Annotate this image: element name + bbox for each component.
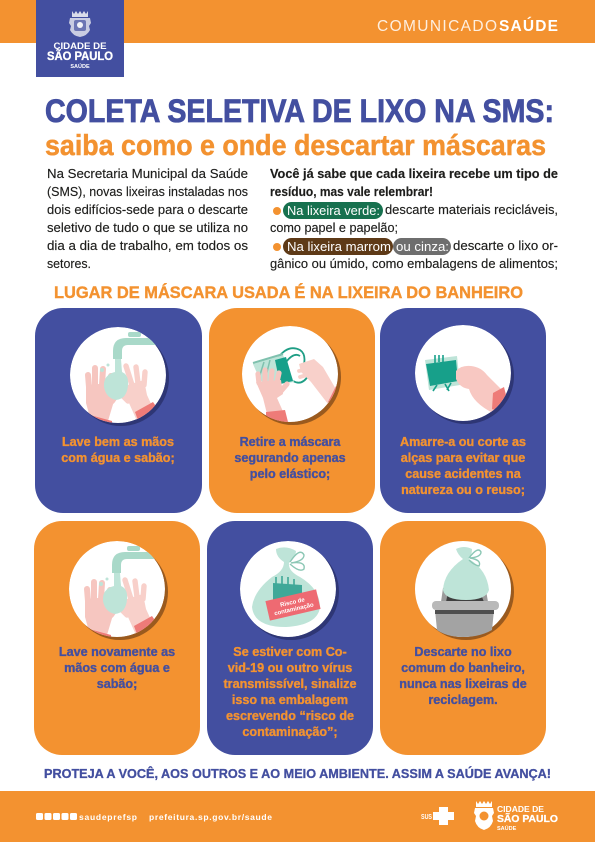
website: prefeitura.sp.gov.br/saude: [149, 812, 272, 822]
intro text: right column: Você já sabe que cada lixeira recebe um tipo de: [270, 166, 558, 181]
logo: Cidade de São Paulo Saúde: SAÚDE: [70, 63, 90, 70]
intro text: left column: dia a dia de trabalho, em todos os: [47, 238, 249, 253]
icon: hands under faucet: [70, 327, 168, 430]
card 1: wash hands: [35, 308, 202, 513]
risk label: contaminação: [274, 602, 315, 617]
card 2: remove mask: [209, 308, 375, 513]
card 5: signal contamination risk: isso na embalagem: [232, 693, 348, 707]
section heading: LUGAR DE MÁSCARA USADA É NA LIXEIRA DO BANHEIRO: [54, 283, 523, 302]
card 5: signal contamination risk: Se estiver com Co-: [233, 645, 347, 659]
logo: Cidade de São Paulo: SÃO PAULO: [497, 812, 558, 825]
card 5: signal contamination risk: contaminação”;: [242, 725, 338, 739]
card 6: discard in common bin: Descarte no lixo: [414, 645, 512, 659]
brown and gray bin bullet: Na lixeira marrom: [287, 239, 391, 254]
card 5: signal contamination risk: vid-19 ou outro vírus: [228, 661, 352, 675]
card 6: discard in common bin: nunca nas lixeiras de: [399, 677, 527, 691]
footer band: [0, 791, 595, 842]
logo: Cidade de São Paulo Saúde: CIDADE DE: [54, 40, 106, 51]
intro text: left column: [47, 166, 249, 271]
title: saiba como e onde descartar máscaras: [45, 130, 546, 162]
logo: SUS: SUS: [421, 814, 432, 821]
card 1: wash hands: com água e sabão;: [61, 451, 175, 465]
logo: Cidade de São Paulo: SAÚDE: [497, 825, 517, 832]
risk label: Risco de: [280, 597, 306, 609]
card 3: tie or cut straps: natureza ou o reuso;: [401, 483, 525, 497]
card 2: remove mask: pelo elástico;: [250, 467, 330, 481]
card 6: discard in common bin: reciclagem.: [428, 693, 498, 707]
intro text: left column: (SMS), novas lixeiras instaladas nos: [47, 184, 248, 199]
card 6: discard in common bin: comum do banheiro,: [401, 661, 525, 675]
card 1: wash hands: Lave bem as mãos: [62, 435, 174, 449]
green bin bullet: como papel e papelão;: [270, 220, 398, 235]
card 5: signal contamination risk: transmissível, sinalize: [223, 677, 357, 691]
icon: bag in gray trash bin: [415, 541, 511, 637]
green bin bullet: descarte materiais recicláveis,: [385, 202, 558, 217]
logo: Cidade de São Paulo Saúde: SÃO PAULO: [47, 50, 113, 63]
logo: Cidade de São Paulo: [474, 801, 558, 832]
card 4: wash hands again: [34, 521, 200, 755]
card 5: signal contamination risk: [207, 521, 373, 755]
header band: [0, 0, 595, 43]
icon: hands holding mask by elastic: [242, 326, 344, 426]
risk label: [265, 589, 321, 621]
card 3: tie or cut straps: cause acidentes na: [405, 467, 522, 481]
intro text: left column: dois edifícios-sede para o descarte: [47, 202, 248, 217]
card 4: wash hands again: Lave novamente as: [59, 645, 175, 659]
header label: Comunicado Saúde: [377, 17, 558, 35]
intro text: right column: resíduo, mas vale relembrar!: [270, 184, 433, 199]
brown and gray bin bullet: descarte o lixo or-: [453, 238, 558, 253]
logo: SUS: [421, 807, 454, 825]
icon: sealed bag with risk label: [240, 541, 336, 637]
brown and gray bin bullet: ou cinza:: [396, 239, 449, 254]
card 3: tie or cut straps: [380, 308, 546, 513]
intro text: left column: setores.: [47, 256, 91, 271]
card 6: discard in common bin: [380, 521, 546, 755]
title: [45, 93, 554, 162]
card 4: wash hands again: mãos com água e: [64, 661, 170, 675]
card 5: signal contamination risk: escrevendo “risco de: [226, 709, 354, 723]
card 2: remove mask: segurando apenas: [234, 451, 346, 465]
green bin bullet: [270, 202, 558, 235]
card 2: remove mask: Retire a máscara: [240, 435, 341, 449]
icons: social media: [36, 813, 77, 820]
icon: hands under faucet: [69, 541, 167, 644]
closing tagline: PROTEJA A VOCÊ, AOS OUTROS E AO MEIO AMBIENTE. ASSIM A SAÚDE AVANÇA!: [44, 766, 551, 781]
header label: Comunicado Saúde: SAÚDE: [499, 17, 558, 35]
intro text: left column: Na Secretaria Municipal da Saúde: [47, 166, 248, 181]
logo: Cidade de São Paulo: CIDADE DE: [497, 804, 544, 814]
icon: hand holding folded mask: [415, 325, 511, 421]
card 3: tie or cut straps: Amarre-a ou corte as: [400, 435, 526, 449]
social handle: saudeprefsp: [79, 812, 137, 822]
card 4: wash hands again: sabão;: [97, 677, 137, 691]
logo: Cidade de São Paulo Saúde: [36, 0, 124, 77]
header label: Comunicado Saúde: COMUNICADO: [377, 18, 497, 35]
green bin bullet: Na lixeira verde:: [287, 203, 380, 218]
brown and gray bin bullet: gânico ou úmido, como embalagens de alimentos;: [270, 256, 558, 271]
intro text: right column: [270, 166, 558, 271]
intro text: left column: seletivo de tudo o que se utiliza no: [47, 220, 248, 235]
brown and gray bin bullet: [270, 238, 558, 271]
card 3: tie or cut straps: alças para evitar que: [401, 451, 525, 465]
